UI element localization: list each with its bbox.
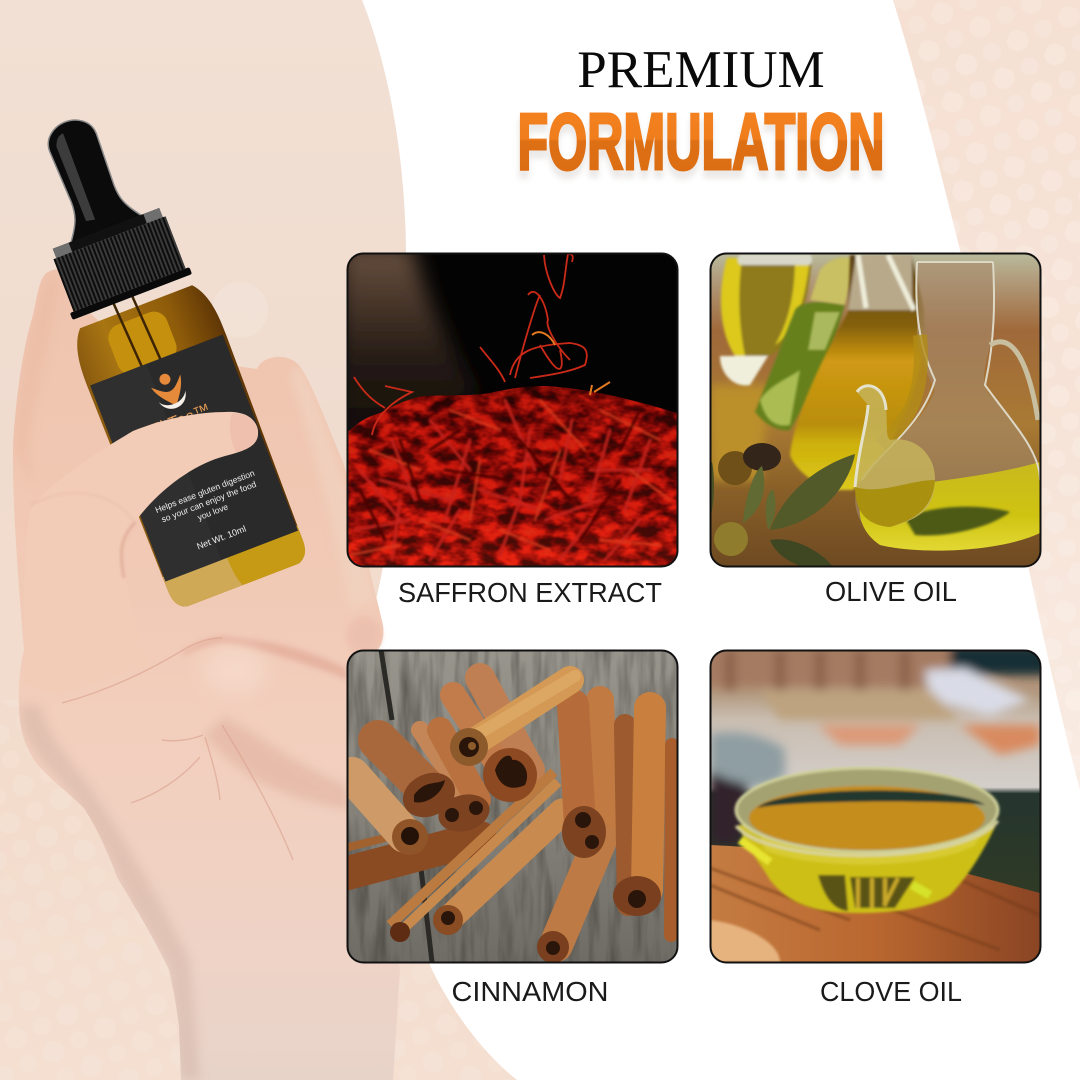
label: olive oil: OLIVE OIL [825,576,957,607]
panel: cinnamon [340,650,677,963]
stick ends [390,728,661,963]
label: saffron extract: SAFFRON EXTRACT [398,577,662,608]
panel border [710,254,1040,566]
bottle base [163,526,310,611]
hand [13,269,400,1080]
logo icon [148,368,191,414]
label: you love [196,501,230,522]
label: FitTec™ [148,400,213,440]
palm shadow under thumb [205,717,350,810]
glass bowl [736,768,998,913]
label: cinnamon: CINNAMON [452,976,608,1007]
title: premium: PREMIUM [577,41,825,99]
hand creases [62,638,293,860]
background: right peach wave [893,0,1080,790]
panel border [710,650,1040,962]
label: clove oil: CLOVE OIL [820,976,962,1007]
title: formulation [517,97,885,193]
glass jug [855,262,1040,551]
label: Helps ease gluten digestion [154,468,256,515]
wrist shading [19,705,200,1080]
floating strands [354,254,587,435]
ribbed collar [46,205,192,320]
olives and leaves [710,443,855,566]
wooden board [710,845,1040,962]
inner glow [104,308,181,378]
background: left peach wave [0,0,517,1080]
table glow [710,385,770,480]
back finger shading [28,377,33,394]
back jar [720,254,812,385]
saffron pile [347,380,677,570]
thumb highlight [208,643,262,690]
big decanter [790,255,924,490]
fingertip lump [346,616,382,656]
blurred backdrop wedge [348,254,476,431]
panel: saffron extract [340,245,677,570]
wood gaps [381,650,432,962]
panel border [348,650,678,962]
rubber bulb [30,108,142,243]
product: dropper bottle [0,95,312,612]
bottle body [67,280,312,612]
crease shadow under fingers [183,636,350,680]
cinnamon sticks [340,676,672,945]
panel border [348,254,678,566]
panel: clove oil [700,645,1050,962]
blurred background objects [700,645,1050,845]
green bottle [755,302,845,430]
front finger over bottle [24,412,258,695]
panel: olive oil [710,253,1040,566]
small glass cruet [855,386,935,527]
label: Net Wt. 10ml [195,524,248,552]
label: so your can enjoy the food [160,479,258,524]
dropper tube [112,291,161,369]
label [90,335,298,581]
